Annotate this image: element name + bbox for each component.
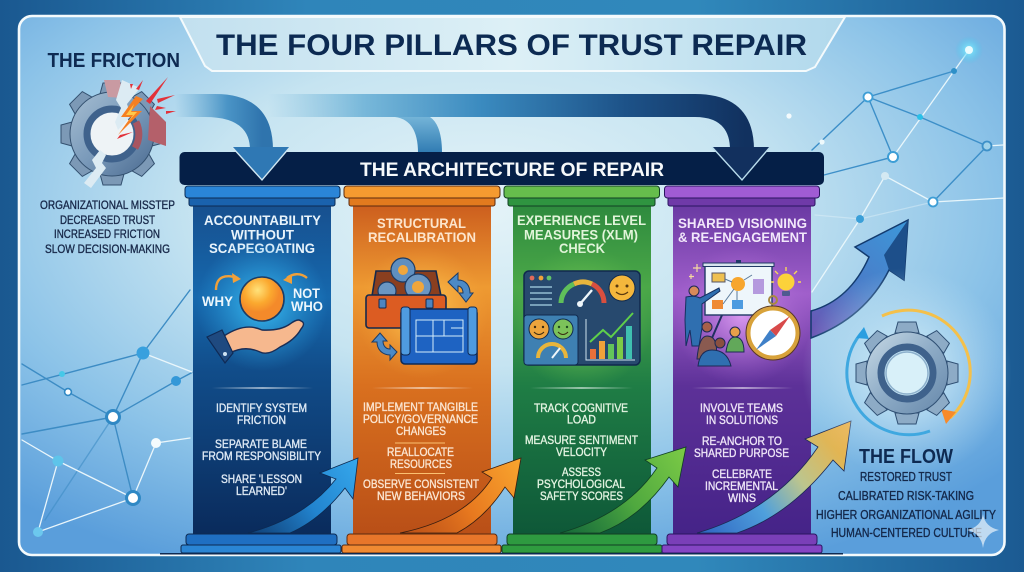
flow list: CALIBRATED RISK-TAKING bbox=[838, 489, 974, 503]
icon: presentation and compass bbox=[672, 245, 812, 385]
growth arrow: orange bbox=[400, 458, 521, 533]
pillar bullets: INCREMENTAL bbox=[705, 479, 778, 493]
pillar heading: & RE-ENGAGEMENT bbox=[678, 229, 807, 245]
title: THE FOUR PILLARS OF TRUST REPAIR bbox=[216, 29, 807, 62]
icon: gear with cycle arrows bbox=[847, 310, 970, 435]
pillar bullets: FROM RESPONSIBILITY bbox=[202, 449, 321, 463]
icon: cracked gear with spark bbox=[61, 77, 176, 188]
pillar heading bbox=[517, 212, 646, 256]
arrow band: to first pillar bbox=[175, 94, 273, 150]
pillar bullets: RESOURCES bbox=[390, 457, 452, 471]
flow list: HUMAN-CENTERED CULTURE bbox=[831, 526, 982, 540]
base bbox=[181, 534, 341, 553]
base bbox=[502, 534, 662, 553]
pillar heading: CHECK bbox=[559, 240, 605, 256]
pillar bullets: ASSESS bbox=[562, 465, 601, 479]
pillar bullets: INVOLVE TEAMS bbox=[700, 401, 783, 415]
pillar bullets: WINS bbox=[728, 491, 756, 505]
pillar bullets: MEASURE SENTIMENT bbox=[525, 433, 639, 447]
bottom line under pillars bbox=[160, 553, 843, 554]
capital bbox=[664, 186, 820, 206]
pillar bullets: PSYCHOLOGICAL bbox=[537, 477, 625, 491]
pillar bullets: LEARNED' bbox=[236, 484, 287, 498]
growth arrow: multicolour bbox=[697, 421, 851, 533]
pillar heading: EXPERIENCE LEVEL bbox=[517, 212, 646, 228]
pillar heading bbox=[368, 215, 476, 245]
pillar bullets bbox=[694, 401, 789, 505]
capital bbox=[344, 186, 500, 206]
pillar heading bbox=[678, 215, 807, 245]
icon: hand holding sphere: WHY bbox=[202, 293, 234, 309]
pillar bullets: POLICY/GOVERNANCE bbox=[363, 412, 478, 426]
header text: THE ARCHITECTURE OF REPAIR bbox=[360, 159, 664, 181]
pillar bullets: IMPLEMENT TANGIBLE bbox=[363, 400, 478, 414]
pillar bullets: IN SOLUTIONS bbox=[706, 413, 778, 427]
icon: hand holding sphere: WHO bbox=[291, 298, 323, 314]
pillar bullets bbox=[363, 400, 480, 503]
pillar heading: WITHOUT bbox=[231, 226, 294, 242]
network: top right bbox=[786, 36, 1004, 292]
title tab bbox=[180, 17, 845, 71]
arrow band: to second and fourth pillars bbox=[268, 94, 754, 153]
pillar 2: structural recalibration bbox=[342, 186, 501, 553]
pillar bullets: SHARED PURPOSE bbox=[694, 446, 789, 460]
friction list: DECREASED TRUST bbox=[60, 213, 155, 227]
friction heading: THE FRICTION bbox=[48, 50, 180, 72]
icon: toolbox and blueprint bbox=[356, 246, 488, 378]
icon: hand holding sphere bbox=[196, 239, 328, 371]
pillar bullets: NEW BEHAVIORS bbox=[377, 489, 465, 503]
pillar heading: ACCOUNTABILITY bbox=[204, 212, 322, 228]
pillar bullets: FRICTION bbox=[237, 413, 286, 427]
glow behind gear bbox=[802, 268, 1012, 478]
pillar bullets: IDENTIFY SYSTEM bbox=[216, 401, 307, 415]
pillar bullets: CELEBRATE bbox=[712, 467, 772, 481]
pillar 4: shared visioning bbox=[662, 186, 822, 553]
icon: hand holding sphere: NOT bbox=[293, 285, 320, 301]
pillar bullets: CHANGES bbox=[396, 424, 446, 438]
flow list: HIGHER ORGANIZATIONAL AGILITY bbox=[816, 508, 997, 522]
pillar heading: STRUCTURAL bbox=[377, 215, 466, 231]
network: bottom left bbox=[22, 290, 193, 537]
pillar 1: accountability bbox=[181, 186, 341, 553]
capital bbox=[185, 186, 340, 206]
pillar bullets: REALLOCATE bbox=[387, 445, 454, 459]
friction list bbox=[40, 198, 175, 256]
friction list: INCREASED FRICTION bbox=[54, 227, 160, 241]
pillar bullets bbox=[525, 401, 639, 503]
pillar bullets: VELOCITY bbox=[556, 445, 607, 459]
icon: sparkle bbox=[967, 514, 999, 548]
pillar heading: MEASURES (XLM) bbox=[524, 226, 638, 242]
big arrow: blue-purple rising bbox=[811, 220, 908, 338]
icon: dashboard bbox=[510, 246, 654, 390]
pillar bullets: LOAD bbox=[567, 412, 596, 426]
growth arrow: green bbox=[560, 447, 686, 533]
pillar bullets bbox=[202, 401, 321, 498]
pillar 3: experience level measures bbox=[502, 186, 662, 553]
flow list: RESTORED TRUST bbox=[860, 470, 952, 484]
capital bbox=[504, 186, 660, 206]
dark header bar bbox=[180, 152, 824, 185]
base bbox=[662, 534, 822, 553]
section: the friction bbox=[40, 50, 180, 256]
pillar bullets: SAFETY SCORES bbox=[540, 489, 623, 503]
friction list: SLOW DECISION-MAKING bbox=[45, 242, 170, 256]
arrowhead: fourth pillar bbox=[712, 147, 770, 180]
growth arrow: blue bbox=[248, 458, 358, 533]
pillar heading bbox=[204, 212, 322, 256]
pillar bullets: OBSERVE CONSISTENT bbox=[363, 477, 480, 491]
base bbox=[342, 534, 501, 553]
pillar bullets: TRACK COGNITIVE bbox=[534, 401, 628, 415]
flow heading: THE FLOW bbox=[859, 446, 953, 468]
pillar heading: RECALIBRATION bbox=[368, 229, 476, 245]
pillar heading: SCAPEGOATING bbox=[209, 240, 315, 256]
pillar bullets: SEPARATE BLAME bbox=[215, 437, 307, 451]
arrowhead: first pillar bbox=[232, 147, 290, 180]
pillar heading: SHARED VISIONING bbox=[678, 215, 807, 231]
friction list: ORGANIZATIONAL MISSTEP bbox=[40, 198, 175, 212]
pillar bullets: RE-ANCHOR TO bbox=[702, 434, 782, 448]
section: the flow bbox=[802, 268, 1012, 540]
pillar bullets: SHARE 'LESSON bbox=[221, 472, 302, 486]
flow list bbox=[816, 470, 997, 540]
